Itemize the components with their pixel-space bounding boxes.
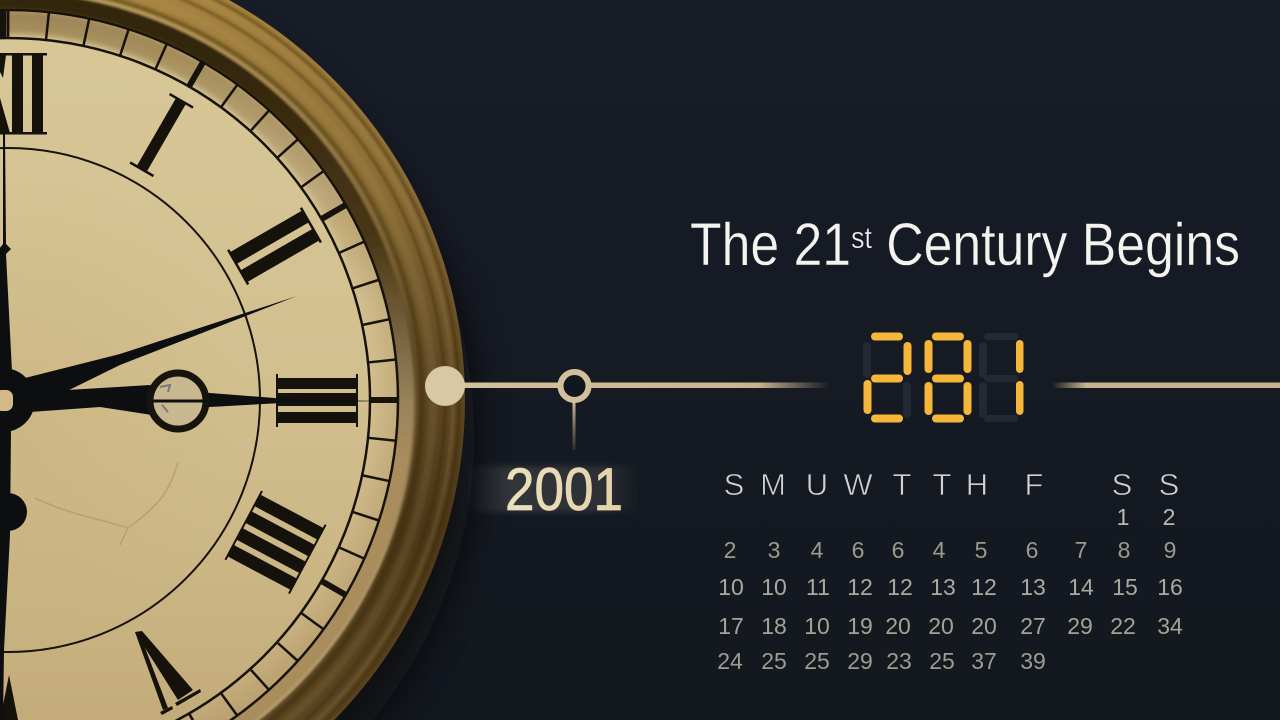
date row 5: 25 [929,648,955,674]
numeral V [135,631,201,715]
numeral II [227,207,322,285]
clock dial [0,9,399,720]
date row 4: 18 [761,613,787,639]
date row 2: 9 [1164,537,1176,563]
numeral IIII [225,490,327,594]
weekday header: S [724,467,744,502]
wall clock [0,0,474,720]
weekday header: S [1112,467,1132,502]
water stains on the dial [35,462,178,545]
digit 1 [1016,340,1024,415]
clock hands [0,133,400,720]
hour hand [30,385,400,415]
hour hand ring [150,373,206,429]
title: st [851,220,872,255]
date row 4: 10 [804,613,830,639]
weekday header: H [966,467,988,502]
date row 5 [717,648,1046,674]
date row 3: 14 [1068,574,1094,600]
weekday header: W [843,467,873,502]
numeral VI fragment [0,675,18,720]
brass bezel [0,0,465,720]
weekday header: U [806,467,828,502]
date row 5: 25 [804,648,830,674]
date row 5: 37 [971,648,997,674]
weekday header [724,467,1179,502]
numeral I [129,93,194,177]
date row 4: 17 [718,613,744,639]
date row 3: 13 [930,574,956,600]
date row 2: 6 [852,537,864,563]
date row 1: 1 [1117,504,1129,530]
timeline left segment [460,382,830,388]
brass pin [0,390,13,411]
timeline right segment [1052,382,1280,388]
date row 5: 25 [761,648,787,674]
minute hand [25,296,297,395]
date row 4: 20 [885,613,911,639]
date row 2: 7 [1075,537,1087,563]
date row 3: 12 [887,574,913,600]
date row 4: 20 [928,613,954,639]
vertical second hand [0,133,12,372]
title: The 21 [690,211,877,278]
date row 4 [718,613,1183,639]
date row 3: 16 [1157,574,1183,600]
date row 5: 23 [886,648,912,674]
date row 2: 4 [811,537,824,563]
date row 5: 39 [1020,648,1046,674]
date row 2: 2 [724,537,736,563]
date row 3: 11 [806,574,830,600]
calendar [717,467,1183,674]
timeline marker 2001 [560,372,588,450]
date row 3: 10 [718,574,744,600]
date row 1 [1117,504,1175,530]
minute track [0,10,398,720]
date row 4: 29 [1067,613,1093,639]
date row 3: 12 [847,574,873,600]
date row 3: 10 [761,574,787,600]
digital display 281 [863,332,1024,422]
date row 5: 29 [847,648,873,674]
date row 3: 13 [1020,574,1046,600]
date row 4: 34 [1157,613,1183,639]
numeral XII [0,53,47,134]
date row 2: 6 [1026,537,1038,563]
timeline start dot [425,366,465,406]
date row 4: 19 [847,613,873,639]
date row 2: 4 [933,537,946,563]
date row 4: 22 [1110,613,1136,639]
date row 3 [718,574,1183,600]
digit 2 [864,332,912,422]
weekday header: T [933,467,952,502]
date row 2 [724,537,1176,563]
date row 5: 24 [717,648,743,674]
numeral III [276,374,358,427]
date row 2: 6 [892,537,904,563]
date row 2: 8 [1118,537,1130,563]
weekday header: F [1025,467,1043,502]
weekday header: S [1159,467,1179,502]
date row 1: 2 [1163,504,1175,530]
date row 2: 3 [768,537,780,563]
ghost segments [863,333,1018,422]
inner chapter ring [0,148,260,652]
year label 2001: 2001 [505,456,623,523]
date row 2: 5 [975,537,987,563]
date row 4: 20 [971,613,997,639]
weekday header: T [893,467,912,502]
date row 3: 15 [1112,574,1138,600]
date row 3: 12 [971,574,997,600]
date row 4: 27 [1020,613,1046,639]
centre hub [0,368,35,432]
digit 8 [924,332,972,422]
weekday header: M [760,467,786,502]
